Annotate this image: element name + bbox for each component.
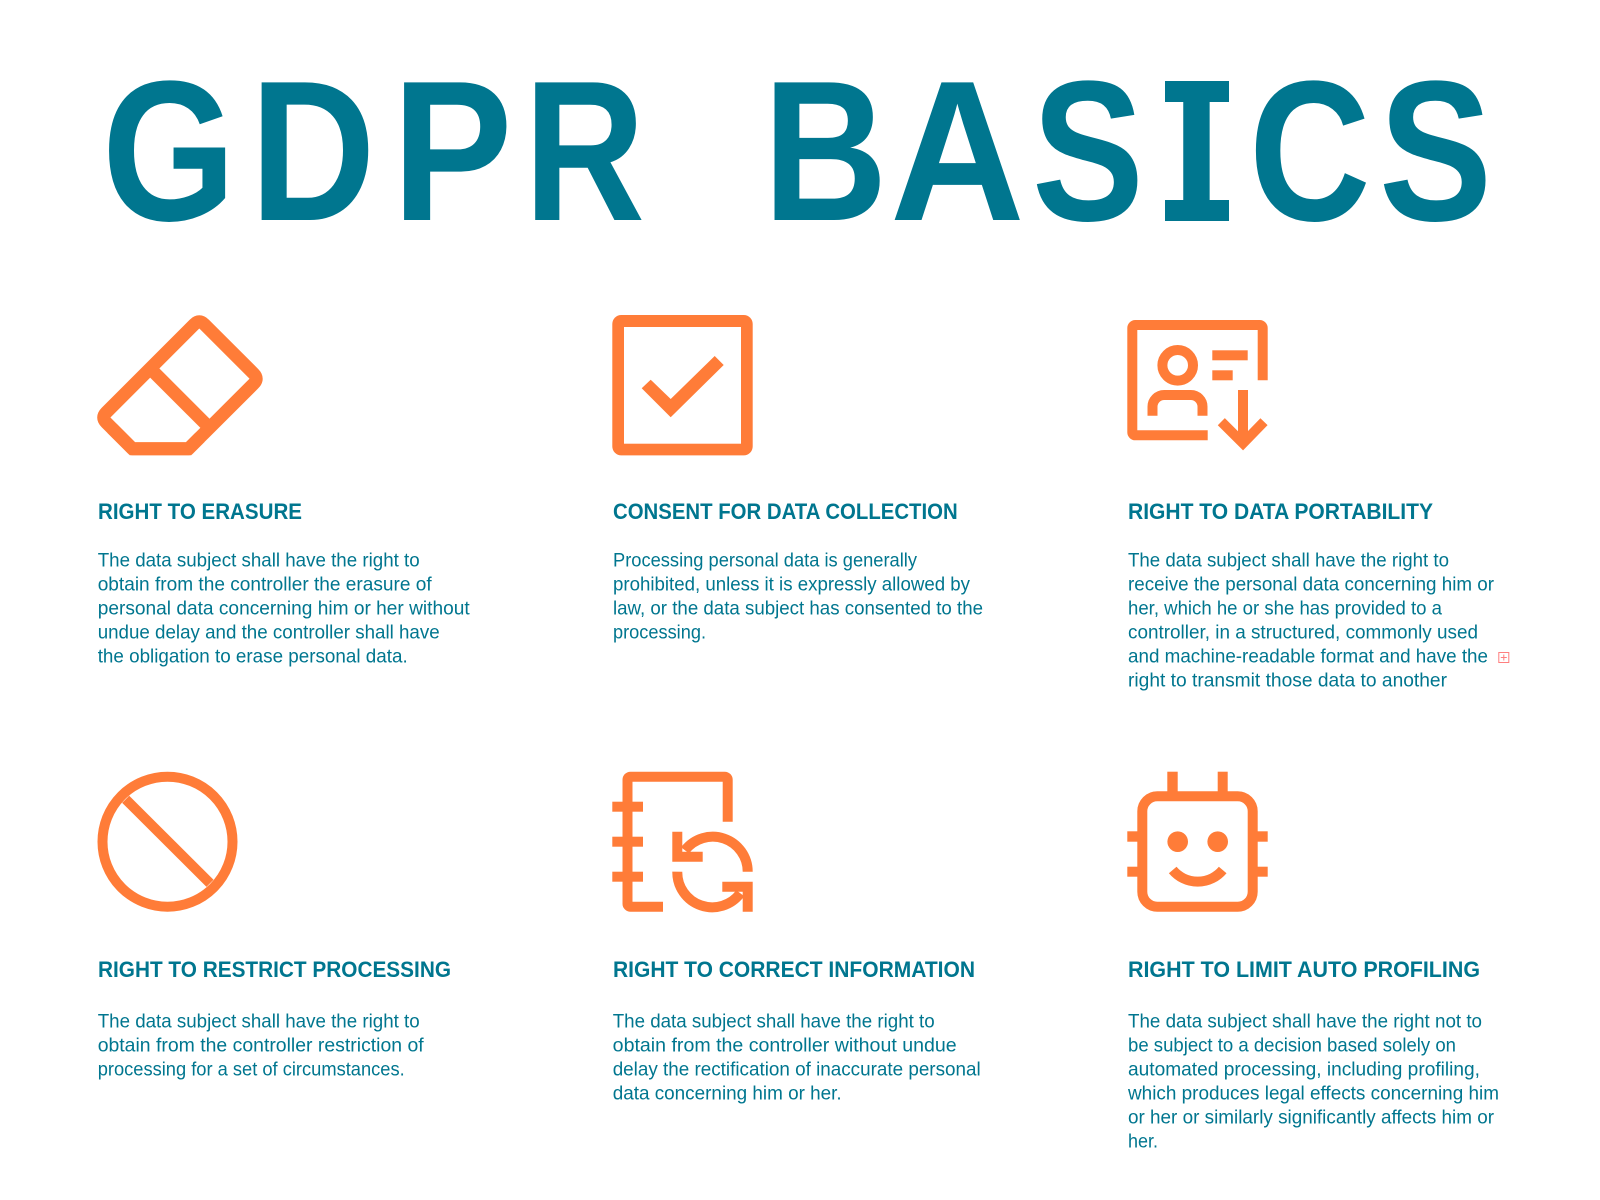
text: right to erasure description: The data subject shall have the right to [98,550,420,572]
panel: consent for data collection [612,315,983,644]
title: R [524,40,645,263]
text: portability description: and machine-readable format and have the [1128,646,1488,668]
text: correct description: delay the rectification of inaccurate personal [613,1059,981,1081]
text: correct description: data concerning him or her. [613,1083,842,1105]
icon: robot face [1127,772,1268,907]
title [102,40,1492,263]
text: correct description: The data subject shall have the right to [613,1011,935,1033]
title: D [250,40,376,263]
panel: right to limit auto profiling [1127,772,1499,1153]
icon: eraser [104,322,256,449]
text: consent description: law, or the data subject has consented to the [613,598,983,620]
text: restrict description: obtain from the controller restriction of [98,1035,424,1057]
icon: prohibited sign [102,777,232,907]
text: consent description: prohibited, unless it is expressly allowed by [613,574,970,596]
text: portability description: controller, in a structured, commonly used [1128,622,1478,644]
text: profiling description: The data subject shall have the right not to [1128,1011,1482,1033]
panel: right to erasure [98,322,470,668]
text: restrict description [98,1011,424,1081]
title: S [1379,40,1492,263]
text: portability description: right to transmit those data to another [1128,670,1447,692]
title: G [102,40,236,263]
text: right to erasure description: the obligation to erase personal data. [98,646,408,668]
text: restrict description: processing for a set of circumstances. [98,1059,405,1081]
text: profiling description: or her or similarly significantly affects him or [1128,1107,1494,1129]
icon: profile card with download arrow [1132,325,1264,443]
text: portability description: The data subject shall have the right to [1128,550,1449,572]
title: P [392,40,512,263]
text: profiling description: which produces legal effects concerning him [1127,1083,1499,1105]
title: S [1032,40,1144,263]
heading: right to data portability: RIGHT TO DATA PORTABILITY [1128,499,1433,524]
text: profiling description: her. [1128,1131,1158,1153]
text: consent description: Processing personal data is generally [613,550,917,572]
icon: overflow text marker [1499,652,1509,662]
text: right to erasure description [98,550,470,668]
title: A [890,40,1025,263]
panel: right to restrict processing [98,777,451,1081]
text: restrict description: The data subject shall have the right to [98,1011,420,1033]
text: portability description: her, which he or she has provided to a [1128,598,1442,620]
text: portability description: receive the personal data concerning him or [1128,574,1494,596]
panel: right to correct information [612,777,981,1105]
text: right to erasure description: obtain from the controller the erasure of [98,574,432,596]
panel: right to data portability [1128,325,1509,692]
text: profiling description: be subject to a decision based solely on [1128,1035,1456,1057]
text: correct description: obtain from the controller without undue [613,1035,957,1057]
text: correct description [613,1011,981,1105]
title: I [1171,40,1222,263]
text: profiling description [1127,1011,1499,1153]
icon: checkbox [612,315,753,455]
title: B [763,40,887,263]
text: portability description [1128,550,1494,692]
text: right to erasure description: undue delay and the controller shall have [98,622,440,644]
text: consent description: processing. [613,622,706,644]
text: right to erasure description: personal data concerning him or her without [98,598,470,620]
heading: consent for data collection: CONSENT FOR DATA COLLECTION [613,499,958,524]
heading: right to limit auto profiling: RIGHT TO LIMIT AUTO PROFILING [1128,957,1480,982]
heading: right to restrict processing: RIGHT TO RESTRICT PROCESSING [98,957,451,982]
text: profiling description: automated processing, including profiling, [1128,1059,1480,1081]
title: C [1249,40,1370,263]
text: consent description [613,550,983,644]
heading: right to correct information: RIGHT TO CORRECT INFORMATION [613,957,975,982]
icon: notebook with refresh arrows [612,777,748,912]
heading: right to erasure: RIGHT TO ERASURE [98,499,302,524]
